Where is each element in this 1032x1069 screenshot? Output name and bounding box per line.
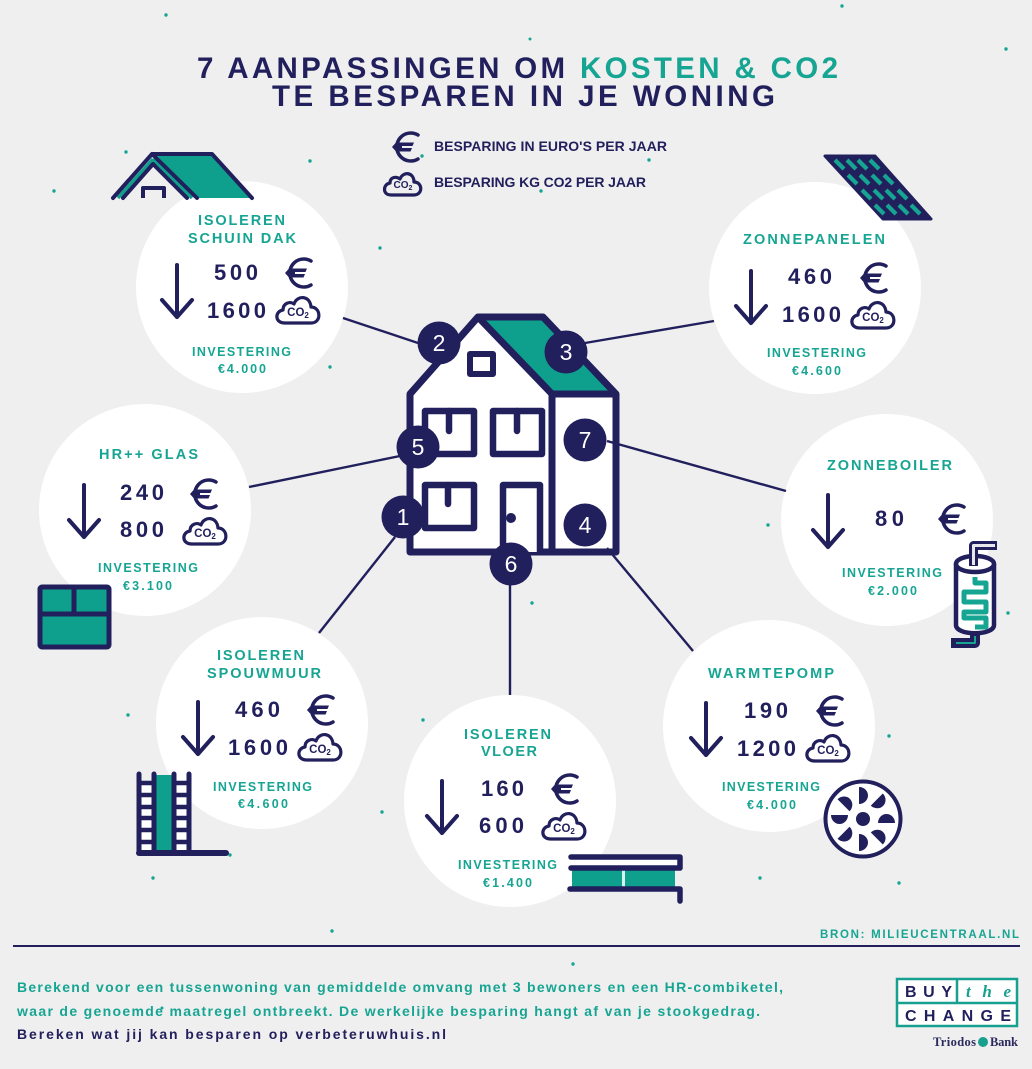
icon: co2 cloud: 2 bbox=[304, 311, 309, 320]
icon: euro bbox=[551, 775, 577, 803]
panel: zonnepanelen bbox=[709, 182, 921, 394]
legend euro label: BESPARING IN EURO'S PER JAAR bbox=[434, 138, 667, 154]
icon: cavity wall bbox=[139, 774, 226, 853]
investment: €4.600 bbox=[238, 797, 288, 811]
number badges: 7 bbox=[579, 427, 591, 453]
icon: euro bbox=[190, 480, 216, 508]
icon: solar panel bbox=[825, 156, 931, 219]
footer text: waar de genoemde maatregel ontbreekt. De werkelijke besparing hangt af van je stookgedrag. bbox=[16, 1003, 760, 1019]
heading: ISOLEREN bbox=[217, 648, 304, 664]
icon: co2 cloud: CO bbox=[287, 307, 304, 319]
panel: isoleren schuin dak bbox=[136, 181, 348, 393]
connector lines bbox=[249, 318, 786, 695]
logo: buy the change bbox=[897, 979, 1017, 1026]
heading: ISOLEREN bbox=[198, 213, 285, 229]
co2 saving: 800 bbox=[120, 517, 164, 542]
icon: co2 cloud bbox=[852, 303, 894, 328]
investment bbox=[98, 561, 198, 593]
icon: co2 cloud bbox=[299, 735, 341, 760]
icon: co2 cloud: CO bbox=[194, 528, 211, 540]
logo: buy the change: CHANGE bbox=[905, 1008, 1011, 1025]
icon: co2 cloud: 2 bbox=[570, 827, 575, 836]
euro saving: 190 bbox=[744, 698, 788, 723]
co2 saving: 1200 bbox=[737, 736, 796, 761]
icon: heat pump fan bbox=[826, 782, 900, 856]
logo: buy the change: the bbox=[966, 982, 1011, 1001]
euro saving: 160 bbox=[481, 776, 524, 801]
euro saving: 80 bbox=[875, 506, 904, 531]
number badges: 1 bbox=[397, 504, 409, 530]
investment: INVESTERING bbox=[722, 780, 820, 794]
icon: legend co2 cloud: CO bbox=[394, 180, 409, 191]
icon: co2 cloud: 2 bbox=[879, 316, 884, 325]
icon: euro bbox=[285, 259, 311, 287]
number badges: 2 bbox=[433, 330, 445, 356]
title: 7 AANPASSINGEN OM KOSTEN & CO2 bbox=[197, 52, 838, 85]
investment: INVESTERING bbox=[192, 345, 291, 359]
arrow bbox=[691, 703, 721, 755]
icon: co2 cloud: CO bbox=[309, 744, 326, 756]
euro saving: 240 bbox=[120, 480, 164, 505]
investment: €2.000 bbox=[868, 584, 917, 598]
icon: co2 cloud: 2 bbox=[211, 532, 216, 541]
heading: SPOUWMUUR bbox=[207, 666, 322, 682]
number badges: 3 bbox=[560, 339, 572, 365]
icon: solar boiler bbox=[951, 546, 997, 643]
footer text bbox=[16, 979, 783, 1042]
investment: INVESTERING bbox=[458, 858, 557, 872]
logo: buy the change: BUY bbox=[905, 984, 952, 1001]
investment bbox=[192, 345, 291, 376]
footer text: Berekend voor een tussenwoning van gemiddelde omvang met 3 bewoners en een HR-combiketel, bbox=[17, 979, 783, 995]
arrow bbox=[183, 702, 213, 754]
house illustration bbox=[249, 317, 786, 695]
arrow bbox=[736, 271, 766, 323]
investment: INVESTERING bbox=[98, 561, 198, 575]
investment: €1.400 bbox=[483, 876, 532, 890]
legend co2 label: BESPARING KG CO2 PER JAAR bbox=[434, 174, 646, 190]
heading: SCHUIN DAK bbox=[188, 231, 297, 247]
investment: INVESTERING bbox=[213, 780, 312, 794]
logo: triodos bank: Bank bbox=[990, 1035, 1018, 1049]
number badges bbox=[382, 322, 606, 586]
co2 saving: 1600 bbox=[228, 735, 288, 760]
icon: co2 cloud bbox=[277, 298, 319, 323]
icon: legend co2 cloud bbox=[384, 174, 421, 195]
heading bbox=[188, 213, 297, 247]
icon: co2 cloud bbox=[807, 736, 849, 761]
windows bbox=[425, 411, 542, 528]
number badges: 5 bbox=[412, 434, 424, 460]
panel: hr++ glas bbox=[39, 404, 251, 616]
co2 saving: 1600 bbox=[782, 302, 841, 327]
investment: INVESTERING bbox=[842, 566, 942, 580]
icon: legend co2 cloud: 2 bbox=[409, 185, 413, 192]
icon: co2 cloud: CO bbox=[817, 745, 834, 757]
roof bbox=[478, 317, 614, 394]
icon: euro bbox=[307, 696, 333, 724]
euro saving: 460 bbox=[788, 264, 832, 289]
icon: euro bbox=[860, 264, 886, 292]
icon: legend euro bbox=[392, 133, 418, 161]
door bbox=[503, 485, 540, 552]
icon: co2 cloud: CO bbox=[553, 823, 570, 835]
co2 saving: 600 bbox=[479, 813, 524, 838]
attic window bbox=[470, 354, 493, 374]
icon: co2 cloud: 2 bbox=[326, 748, 331, 757]
title: TE BESPAREN IN JE WONING bbox=[272, 80, 775, 113]
panel: isoleren spouwmuur bbox=[156, 617, 368, 829]
arrow bbox=[69, 485, 99, 537]
icon: roof bbox=[113, 154, 252, 198]
investment: €4.000 bbox=[747, 798, 796, 812]
heading: VLOER bbox=[481, 744, 538, 760]
icon: euro bbox=[816, 697, 842, 725]
title bbox=[197, 52, 838, 113]
arrow bbox=[813, 495, 843, 547]
investment bbox=[842, 566, 942, 598]
icon: glass window bbox=[40, 587, 109, 647]
logo: triodos bank: Triodos bbox=[933, 1035, 976, 1049]
icon: co2 cloud bbox=[184, 519, 226, 544]
icon: co2 cloud: CO bbox=[862, 312, 879, 324]
euro saving: 460 bbox=[235, 697, 280, 722]
investment: INVESTERING bbox=[767, 346, 866, 360]
euro saving: 500 bbox=[214, 260, 258, 285]
icon: co2 cloud bbox=[543, 814, 585, 839]
icon: co2 cloud: 2 bbox=[834, 749, 839, 758]
panel: warmtepomp bbox=[663, 620, 875, 832]
arrow bbox=[162, 265, 192, 317]
number badges: 4 bbox=[579, 512, 592, 538]
heading: ISOLEREN bbox=[464, 727, 551, 743]
source: BRON: MILIEUCENTRAAL.NL bbox=[820, 929, 1019, 941]
logo: triodos bank bbox=[933, 1035, 1018, 1049]
panel: zonneboiler bbox=[781, 414, 993, 626]
icon: euro bbox=[938, 505, 964, 533]
heading bbox=[464, 727, 551, 760]
icon: floor insulation bbox=[570, 857, 680, 901]
heading: ZONNEPANELEN bbox=[743, 232, 885, 248]
panel: isoleren vloer bbox=[404, 695, 616, 907]
investment bbox=[722, 780, 820, 812]
investment: €3.100 bbox=[123, 579, 172, 593]
heading: HR++ GLAS bbox=[99, 447, 198, 463]
heading bbox=[207, 648, 322, 682]
investment bbox=[213, 780, 312, 811]
footer text: Bereken wat jij kan besparen op verbeteruwhuis.nl bbox=[17, 1026, 446, 1042]
heading: ZONNEBOILER bbox=[827, 458, 953, 474]
investment: €4.000 bbox=[218, 362, 266, 376]
arrow bbox=[427, 781, 457, 833]
investment bbox=[458, 858, 557, 890]
house walls bbox=[410, 320, 616, 552]
investment bbox=[767, 346, 866, 378]
number badges: 6 bbox=[505, 551, 517, 577]
heading: WARMTEPOMP bbox=[708, 666, 834, 682]
co2 saving: 1600 bbox=[207, 298, 266, 323]
legend bbox=[384, 133, 667, 195]
investment: €4.600 bbox=[792, 364, 841, 378]
